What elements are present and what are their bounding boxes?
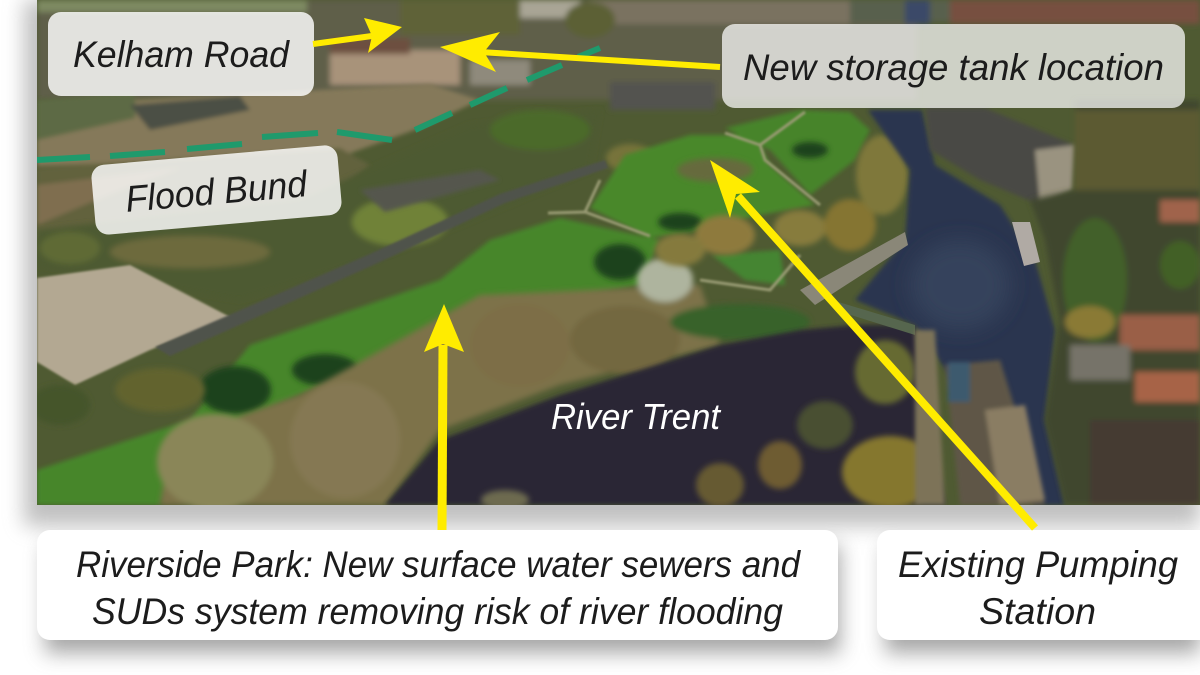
- right bank town: [1030, 100, 1200, 505]
- label: River Trent: River Trent: [551, 396, 722, 437]
- paths and castle grounds: [548, 112, 820, 290]
- footbridge: [838, 302, 915, 335]
- callout: Riverside Park: [37, 530, 838, 640]
- callout: Existing Pumping Station: Station: [979, 591, 1096, 632]
- castle: [925, 108, 1075, 205]
- river light reflection: [914, 244, 1006, 326]
- aerial photograph: [30, 0, 1200, 510]
- arrow: to Riverside Park: [424, 304, 464, 530]
- label: Kelham Road: Kelham Road: [73, 34, 290, 75]
- town at top: [37, 0, 1200, 110]
- callout: Existing Pumping Station: [877, 530, 1200, 640]
- callout shadows: [45, 545, 1200, 653]
- arrow: to Kelham Road: [313, 18, 402, 53]
- field and flood bund area: [37, 84, 480, 240]
- car park: [37, 265, 232, 385]
- label: New storage tank location: [722, 24, 1185, 108]
- River Trent main channel: [385, 325, 945, 505]
- peninsula trees: [655, 135, 908, 266]
- river bank wall: [800, 232, 908, 305]
- lawn shadows: [199, 142, 828, 414]
- riverbank tree band: [30, 258, 810, 510]
- photo drop shadow: [24, 0, 1200, 526]
- callout: Riverside Park: Riverside Park: New surface water sewers and: [76, 544, 801, 585]
- label: Flood Bund: [90, 144, 343, 236]
- flood bund dashed line: [37, 48, 600, 160]
- label: Flood Bund: Flood Bund: [124, 163, 310, 220]
- arrow: to existing pumping station: [710, 160, 1035, 528]
- far bank trees: [481, 340, 938, 510]
- label: New storage tank location: New storage tank location: [743, 47, 1164, 88]
- label: Kelham Road: [48, 12, 314, 96]
- river upper channel: [855, 110, 1065, 505]
- middle tree belt: [38, 110, 648, 270]
- existing pumping station structure: [915, 330, 1045, 505]
- riverside park lawns: [37, 110, 870, 505]
- callout: Riverside Park: SUDs system removing risk of river flooding: [92, 591, 783, 632]
- road: [155, 160, 608, 356]
- moored boat: [1012, 222, 1040, 266]
- arrow: to new storage tank location: [440, 32, 720, 72]
- callout: Existing Pumping Station: Existing Pumping: [898, 544, 1178, 585]
